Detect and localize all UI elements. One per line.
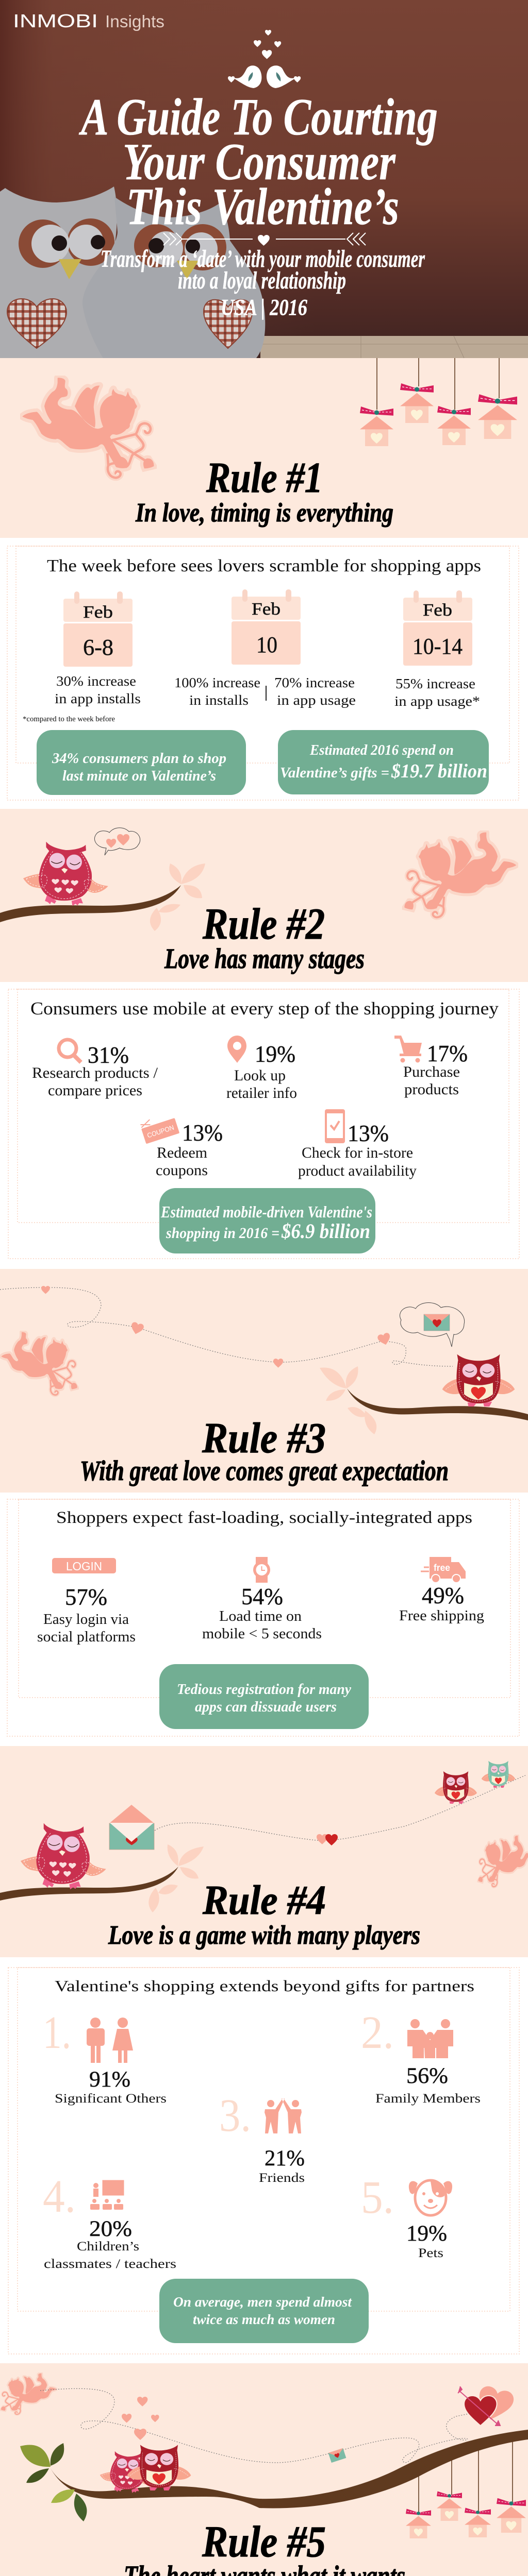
stat: 19% retailer: retailer info xyxy=(226,1084,297,1101)
stat: 55%: in app usage* xyxy=(394,693,480,709)
item 2: family: 56% xyxy=(406,2064,448,2088)
calendar: Feb 6-8: Feb xyxy=(83,603,113,622)
dotted flight path with hearts xyxy=(0,1286,453,1368)
panel: Rule 2 header xyxy=(0,828,516,974)
icon: cupid xyxy=(1,2374,56,2414)
icon: family xyxy=(407,2019,453,2058)
stat: 13% in-store: product availability xyxy=(298,1162,417,1179)
stat: 30% xyxy=(55,673,141,706)
rule 2 heading: Love has many stages xyxy=(164,943,365,974)
item 2: family: 2. xyxy=(361,2007,394,2058)
icon: classroom xyxy=(90,2180,124,2210)
stat: 57% login xyxy=(37,1558,136,1645)
item 3: friends xyxy=(219,2090,305,2185)
callout: tedious registration xyxy=(159,1664,369,1729)
stat: 13% coupons: coupons xyxy=(156,1162,208,1179)
stat: 70% xyxy=(274,675,356,708)
icon: couple xyxy=(87,2018,133,2063)
panel: Rule 3 header xyxy=(0,1286,528,1486)
subtitle xyxy=(101,245,425,320)
rule 2 heading xyxy=(164,899,365,974)
logo: InMobi Insights: Insights xyxy=(105,12,164,31)
hero photo background xyxy=(0,0,528,358)
title: This Valentine’s xyxy=(126,178,399,236)
dotted line with hearts xyxy=(155,1775,525,1845)
panel: Rule 5 header xyxy=(1,2374,528,2576)
stat: 13% in-store: Check for in-store xyxy=(302,1144,413,1161)
heading: Valentine's shopping extends beyond gifts for partners xyxy=(55,1977,474,1995)
stat: 13% coupons: Redeem xyxy=(157,1144,207,1161)
stat: 57% login: Easy login via xyxy=(43,1612,129,1628)
photo: right toy owl xyxy=(82,197,265,358)
stat: 54% load time xyxy=(202,1557,322,1642)
item 4: classmates and teachers: 20% xyxy=(89,2217,132,2241)
wooden shelf xyxy=(260,336,528,358)
stat: 13% coupons: 13% xyxy=(182,1120,223,1146)
title: A Guide To Courting xyxy=(78,88,438,146)
icon: love birds with hearts xyxy=(228,30,301,88)
icon: owl couple xyxy=(100,2445,191,2493)
item 4: classmates and teachers: classmates / teachers xyxy=(44,2257,176,2271)
stat: 17% purchase xyxy=(394,1036,468,1098)
floating hearts xyxy=(122,2397,159,2440)
stat: 13% coupons xyxy=(139,1112,223,1179)
panel: Rule 1 content xyxy=(0,538,528,809)
hero banner xyxy=(0,0,528,358)
branch with leaves xyxy=(320,1366,528,1434)
stat: 54% load time: mobile < 5 seconds xyxy=(202,1626,322,1642)
calendar: Feb 10: Feb xyxy=(252,600,280,619)
item 5: pets: 5. xyxy=(361,2172,394,2223)
stat: 19% retailer xyxy=(226,1036,297,1101)
branch with leaves xyxy=(0,863,205,931)
item 3: friends: Friends xyxy=(259,2171,305,2185)
callout: $19.7 billion: Estimated 2016 spend on xyxy=(309,742,454,758)
item 3: friends: 3. xyxy=(219,2090,251,2141)
stat: 31% research: Research products / xyxy=(32,1064,158,1081)
item 2: family: Family Members xyxy=(375,2092,481,2106)
icon: pink owl xyxy=(23,841,108,906)
stat: 13% in-store xyxy=(298,1109,417,1179)
icon: small green owl xyxy=(482,1761,515,1788)
logo: InMobi Insights: INMOBI xyxy=(13,10,98,31)
item 1: significant others: Significant Others xyxy=(55,2092,167,2106)
icon: watch xyxy=(253,1557,270,1583)
item 5: pets: Pets xyxy=(418,2246,443,2260)
calendar: Feb 10-14: 10-14 xyxy=(412,634,463,659)
rule 1 heading: In love, timing is everything xyxy=(135,498,393,528)
item 4: classmates and teachers: Children’s xyxy=(77,2240,139,2253)
stat: 54% load time: 54% xyxy=(241,1583,283,1609)
branch with leaves xyxy=(0,1844,204,1912)
title xyxy=(78,88,438,236)
stat: 57% login: social platforms xyxy=(37,1629,136,1645)
icon: friends high five xyxy=(265,2098,302,2133)
calendar: Feb 10-14: Feb xyxy=(423,601,452,620)
photo: left toy owl xyxy=(0,187,117,358)
item 1: significant others: 1. xyxy=(43,2007,71,2058)
stat: 100% xyxy=(174,675,260,708)
stat: 13% in-store: 13% xyxy=(348,1120,389,1146)
stat: 100%: 100% increase xyxy=(174,675,260,690)
stat: 19% retailer: Look up xyxy=(234,1067,286,1084)
icon: cupid xyxy=(2,1332,77,1395)
icon: login button xyxy=(52,1558,116,1573)
icon: login button: LOGIN xyxy=(66,1560,102,1573)
callout: men spend: On average, men spend almost xyxy=(173,2294,353,2310)
heading: The week before sees lovers scramble for shopping apps xyxy=(47,556,481,575)
stat: 70%: 70% increase xyxy=(274,675,355,690)
rule 3 heading xyxy=(80,1414,449,1486)
callout: 34% xyxy=(37,730,246,795)
dotted path xyxy=(40,2388,471,2463)
stat: 30%: in app installs xyxy=(55,691,141,706)
icon: coupon: COUPON xyxy=(146,1124,175,1140)
icon: pink owl xyxy=(21,1823,106,1889)
icon: phone with check xyxy=(325,1109,345,1143)
icon: small red owl xyxy=(435,1771,477,1804)
item 1: significant others xyxy=(43,2007,167,2106)
panel: Rule 4 content xyxy=(0,1957,528,2363)
rule 5 heading xyxy=(124,2517,405,2576)
title: Your Consumer xyxy=(123,133,396,191)
rule 1 heading xyxy=(135,454,393,528)
item 4: classmates and teachers: 4. xyxy=(43,2171,76,2222)
logo: InMobi Insights xyxy=(13,10,164,31)
panel: Rule 4 header xyxy=(0,1761,528,1950)
callout: men spend xyxy=(159,2279,369,2343)
subtitle: into a loyal relationship xyxy=(178,267,346,294)
calendar: Feb 10: 10 xyxy=(256,632,277,657)
rule 2 heading: Rule #2 xyxy=(202,899,325,948)
rule 4 heading: Rule #4 xyxy=(202,1878,326,1923)
calendar: Feb 10 xyxy=(232,589,301,665)
item 3: friends: 21% xyxy=(265,2146,305,2171)
stat: 30%: 30% increase xyxy=(56,673,136,689)
stat: 70%: in app usage xyxy=(277,692,356,708)
callout: 34%: last minute on Valentine’s xyxy=(62,768,216,784)
stat: 31% research xyxy=(32,1040,158,1099)
icon: magnifier xyxy=(59,1040,81,1062)
stat: 17% purchase: 17% xyxy=(427,1040,468,1066)
heading: Shoppers expect fast-loading, socially-integrated apps xyxy=(56,1509,472,1527)
panel: Rule 1 header xyxy=(22,358,517,528)
icon: cart xyxy=(394,1036,422,1062)
callout: $19.7 billion: Valentine’s gifts = xyxy=(280,765,389,781)
rule 4 heading xyxy=(108,1878,420,1950)
icon: envelope xyxy=(109,1805,154,1850)
icon: cupid xyxy=(22,378,154,478)
rule 3 heading: Rule #3 xyxy=(202,1414,326,1462)
stat: 17% purchase: Purchase xyxy=(403,1063,460,1080)
stat: 54% load time: Load time on xyxy=(219,1608,302,1624)
icon: delivery truck xyxy=(421,1557,466,1583)
icon: pierced hearts xyxy=(458,2384,516,2426)
subtitle: USA | 2016 xyxy=(221,295,307,320)
callout: $19.7 billion: $19.7 billion xyxy=(391,760,487,782)
rule 1 heading: Rule #1 xyxy=(206,454,323,502)
footnote: *compared to the week before xyxy=(23,715,115,723)
stat: 49% shipping xyxy=(399,1557,484,1624)
thought cloud with envelope xyxy=(400,1302,465,1347)
stat: 19% retailer: 19% xyxy=(255,1041,295,1067)
ornamental divider with heart and arrows xyxy=(163,233,366,246)
stat: 55%: 55% increase xyxy=(395,676,475,691)
hanging houses xyxy=(360,358,517,446)
stat: 31% research: 31% xyxy=(88,1042,129,1068)
calendar: Feb 10-14 xyxy=(403,590,472,666)
callout: $6.9 billion: $6.9 billion xyxy=(281,1219,370,1243)
stat: 49% shipping: 49% xyxy=(422,1582,464,1608)
callout: men spend: twice as much as women xyxy=(193,2312,335,2327)
stat: 31% research: compare prices xyxy=(48,1082,142,1099)
item 1: significant others: 91% xyxy=(89,2067,130,2092)
stat: 49% shipping: Free shipping xyxy=(399,1608,484,1624)
stat: 17% purchase: products xyxy=(404,1081,459,1098)
item 4: classmates and teachers xyxy=(43,2171,176,2271)
thought cloud with hearts xyxy=(94,828,140,855)
callout: 34%: 34% consumers plan to shop xyxy=(52,750,226,767)
icon: small envelope xyxy=(328,2448,346,2463)
callout: $6.9 billion: Estimated mobile-driven Valentine's xyxy=(160,1202,372,1221)
icon: coupon xyxy=(139,1112,179,1144)
icon: cupid flipped xyxy=(478,1836,528,1887)
panel: Rule 2 content xyxy=(0,982,528,1269)
callout: $6.9 billion: shopping in 2016 = xyxy=(166,1225,279,1242)
item 2: family xyxy=(361,2007,481,2106)
panel: Rule 3 content xyxy=(0,1493,528,1746)
callout: tedious registration: Tedious registration for many xyxy=(177,1681,351,1698)
icon: red owl xyxy=(442,1354,515,1406)
callout: tedious registration: apps can dissuade users xyxy=(195,1699,337,1715)
icons: hanging houses xyxy=(406,2491,526,2538)
callout: $6.9 billion xyxy=(159,1188,375,1253)
stat: 100%: in installs xyxy=(189,692,249,708)
stat: 57% login: 57% xyxy=(65,1584,107,1610)
icon: delivery truck: free xyxy=(434,1563,450,1573)
stat: 55% xyxy=(394,676,480,709)
item 5: pets xyxy=(361,2172,452,2260)
icon: map pin xyxy=(227,1036,246,1063)
calendar: Feb 6-8 xyxy=(63,591,133,667)
calendar: Feb 6-8: 6-8 xyxy=(83,635,113,660)
heading: Consumers use mobile at every step of the shopping journey xyxy=(30,998,499,1019)
tree branch xyxy=(20,2430,528,2521)
callout: $19.7 billion xyxy=(278,730,489,794)
icon: dog xyxy=(409,2180,452,2215)
icon: cupid flipped xyxy=(404,833,516,918)
rule 4 heading: Love is a game with many players xyxy=(108,1921,420,1950)
rule 5 heading: Rule #5 xyxy=(202,2517,326,2566)
item 5: pets: 19% xyxy=(406,2222,447,2246)
